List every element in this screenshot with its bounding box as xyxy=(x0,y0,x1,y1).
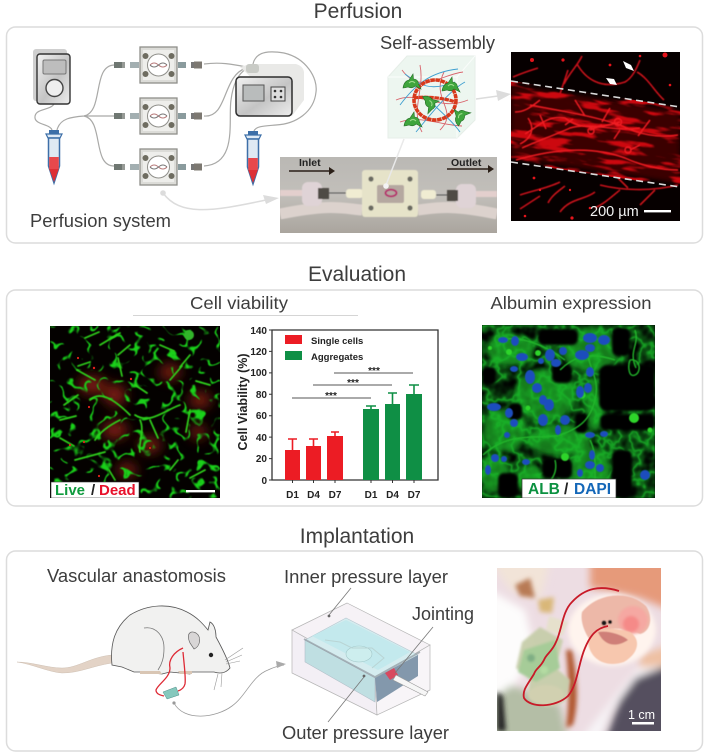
illustration: self-assembly cube xyxy=(388,56,475,138)
legend: Aggregates xyxy=(311,352,363,363)
red tubes xyxy=(156,648,185,696)
legend xyxy=(285,335,363,363)
error bars xyxy=(288,385,419,450)
implanted chip xyxy=(516,616,570,707)
label: live dead: Live xyxy=(55,482,85,499)
label: inner pressure layer: Inner pressure layer xyxy=(284,566,448,587)
significance markers: *** xyxy=(325,391,337,402)
label: ALB DAPI: DAPI xyxy=(574,481,611,498)
label: ALB DAPI xyxy=(522,479,616,498)
y axis title: Cell Viability (%) xyxy=(236,353,250,451)
y ticks: 60 xyxy=(256,411,267,422)
label: ALB DAPI: / xyxy=(564,481,569,498)
icon: collection tube xyxy=(245,131,261,184)
arrow: chip to photo xyxy=(160,190,279,210)
arrow: rat chip to device xyxy=(172,661,286,716)
photo: chip with inlet and outlet: Inlet xyxy=(299,157,321,169)
bars: single cells xyxy=(285,436,343,480)
significance markers xyxy=(292,366,413,402)
icon: chip 3 xyxy=(114,149,202,185)
black gaps between cells xyxy=(482,328,655,498)
panel: perfusion xyxy=(6,25,709,246)
heading: vascular anastomosis: Vascular anastomosis xyxy=(47,565,226,586)
x labels: D4 xyxy=(386,490,399,501)
micrograph: vascular network xyxy=(511,52,680,221)
bars: aggregates xyxy=(363,394,422,480)
title: Implantation: Implantation xyxy=(300,525,414,548)
label: self-assembly: Self-assembly xyxy=(380,32,496,53)
jointing xyxy=(385,668,398,680)
icon: chip 2 xyxy=(114,98,202,134)
heading: albumin expression: Albumin expression xyxy=(490,293,652,313)
heading: cell viability: Cell viability xyxy=(190,293,288,313)
title: Evaluation: Evaluation xyxy=(308,263,406,286)
rat body xyxy=(112,606,230,674)
x labels: D1 xyxy=(286,490,299,501)
jointing leader xyxy=(395,627,433,673)
title: Perfusion: Perfusion xyxy=(314,0,402,23)
icon: source tube xyxy=(46,130,62,183)
x labels: D7 xyxy=(408,490,421,501)
y ticks: 140 xyxy=(250,326,267,337)
x labels: D7 xyxy=(329,490,342,501)
y ticks: 0 xyxy=(261,476,267,487)
y ticks: 40 xyxy=(256,433,267,444)
wound tissue xyxy=(568,594,656,666)
icon: peristaltic pump xyxy=(236,64,304,116)
arrow: cube to micrograph xyxy=(476,90,511,101)
label: perfusion system: Perfusion system xyxy=(30,210,171,231)
y ticks: 80 xyxy=(256,390,267,401)
y ticks: 120 xyxy=(250,347,267,358)
illustration: rat xyxy=(17,606,243,699)
label: outer pressure layer: Outer pressure layer xyxy=(282,722,449,743)
label: ALB DAPI: ALB xyxy=(528,481,560,498)
y ticks: 20 xyxy=(256,454,267,465)
micrograph: live dead xyxy=(50,326,220,499)
x labels: D4 xyxy=(307,490,320,501)
photo: chip with inlet and outlet: Outlet xyxy=(451,157,482,169)
divider under heading xyxy=(133,314,358,316)
icon: syringe pump xyxy=(33,49,70,104)
photo: chip with inlet and outlet xyxy=(280,157,497,233)
mini chip xyxy=(163,687,179,699)
significance markers: *** xyxy=(347,378,359,389)
label: jointing: Jointing xyxy=(412,603,474,624)
photo: implanted device: 1 cm xyxy=(628,708,655,722)
label: live dead: Dead xyxy=(99,482,136,499)
blood tube xyxy=(524,588,619,705)
legend: Single cells xyxy=(311,336,363,347)
x labels: D1 xyxy=(365,490,378,501)
rat ear xyxy=(188,632,200,649)
label: live dead xyxy=(51,482,139,499)
icon: chip 1 xyxy=(114,47,202,83)
photo: implanted device xyxy=(497,568,661,731)
y ticks: 100 xyxy=(250,368,267,379)
panel: evaluation xyxy=(6,290,702,506)
outer leader xyxy=(328,677,364,722)
y ticks xyxy=(250,326,267,487)
label: live dead: / xyxy=(91,482,96,499)
tubing network xyxy=(35,52,316,166)
panel: implantation xyxy=(6,551,702,751)
illustration: device xyxy=(292,588,433,722)
axes xyxy=(272,330,438,480)
pointer: window to cube xyxy=(383,139,404,189)
x labels xyxy=(286,490,421,501)
rat tail xyxy=(17,655,112,673)
chart: cell viability bars xyxy=(236,326,438,501)
micrograph: vascular network: 200 µm xyxy=(590,204,639,220)
significance markers: *** xyxy=(368,366,380,377)
micrograph: albumin DAPI xyxy=(481,325,655,498)
inner leader xyxy=(329,588,351,615)
